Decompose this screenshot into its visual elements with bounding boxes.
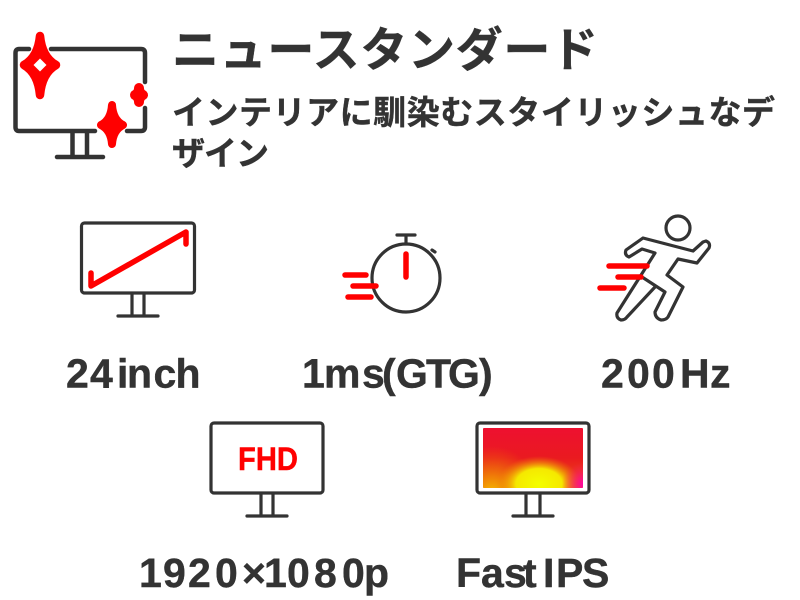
- label: 1920x1080p: 1920×1080p: [139, 550, 389, 596]
- icon: FHD monitor: [211, 423, 323, 516]
- icon: running person: [600, 216, 710, 320]
- title: ニュースタンダード: [172, 24, 598, 76]
- icon: stopwatch: [345, 235, 440, 312]
- subtitle: インテリアに馴染むスタイリッシュなデ: [172, 94, 775, 131]
- icon: monitor with sparkles: [16, 36, 145, 157]
- icon: Fast IPS monitor: [477, 423, 589, 516]
- FHD text: FHD: [238, 441, 298, 477]
- label: 200Hz: 200Hz: [601, 350, 730, 396]
- icon: 24 inch monitor: [82, 223, 194, 316]
- label: 1ms(GTG): 1ms(GTG): [302, 350, 493, 396]
- subtitle: ザイン: [172, 135, 269, 172]
- label: 24inch: 24inch: [66, 350, 201, 396]
- subtitle: [172, 94, 775, 172]
- label: Fast IPS: Fast IPS: [456, 550, 609, 596]
